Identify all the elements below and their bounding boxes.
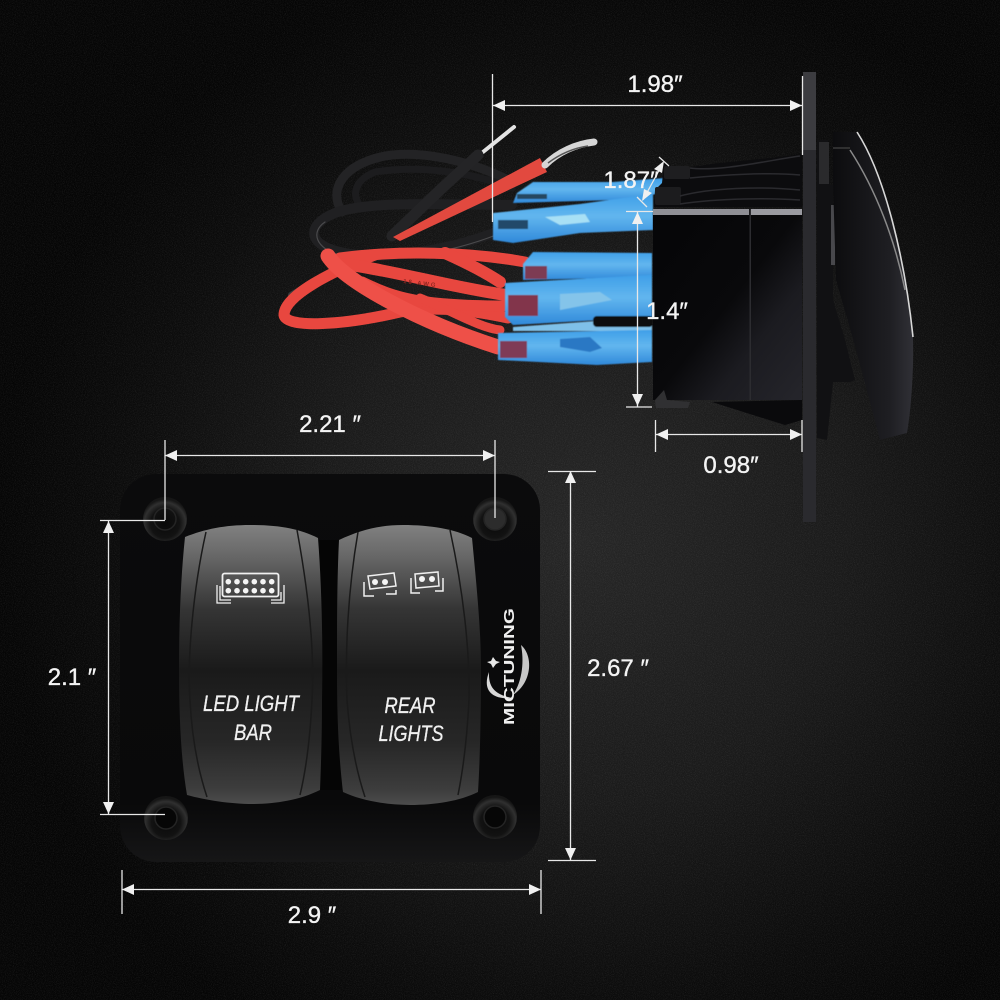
black wires [291, 154, 512, 295]
dimension: 2.1 in: 2.1 ″ [48, 664, 97, 691]
upright black wire with pin [392, 127, 514, 236]
dimension: 1.98 in: 1.98″ [627, 71, 683, 98]
mounting plate edge [803, 72, 816, 522]
rocker frame [318, 540, 342, 790]
rocker: rear lights [337, 525, 481, 805]
dimension: 1.98 in [492, 71, 803, 222]
screw inner details [154, 508, 506, 829]
rocker: LED light bar [179, 525, 322, 804]
screw holes [143, 497, 517, 840]
dimension: 1.87 in: 1.87″ [603, 167, 659, 194]
dimension: 2.67 in [548, 471, 649, 860]
dimension: 0.98 in [656, 420, 802, 479]
icon: rear light right [411, 572, 443, 593]
dimension: 2.9 in: 2.9 ″ [288, 902, 337, 929]
logo: MICTUNING: MICTUNING [501, 608, 518, 725]
front gasket and clip [817, 140, 855, 440]
mounting plate [120, 474, 540, 862]
rocker legend second line: LIGHTS [378, 721, 444, 746]
dimension: 1.4 in: 1.4″ [646, 298, 688, 325]
upright red wire with crimped tip [393, 142, 594, 241]
panel: front view of switch plate [120, 474, 540, 862]
dimension: 1.4 in [626, 211, 688, 407]
dimension: 2.1 in [48, 520, 165, 814]
switch housing [653, 209, 802, 425]
panel: side view of switch with wires [284, 72, 913, 522]
18 AWG wire marking: 18 AWG [403, 279, 438, 289]
dimension: 0.98 in: 0.98″ [703, 452, 759, 479]
dimension: 2.9 in [122, 870, 541, 929]
rocker legend: LED LIGHT [203, 691, 300, 716]
dimension: 1.87 in [603, 157, 669, 207]
rocker seams [189, 530, 313, 797]
switch terminals [654, 154, 802, 207]
dimension: 2.21 in [165, 411, 495, 520]
blue connectors [493, 178, 665, 365]
rocker legend: REAR [384, 693, 436, 718]
dimension: 2.67 in: 2.67 ″ [587, 655, 649, 682]
rocker seams [346, 530, 469, 797]
icon: LED light bar [217, 574, 284, 603]
rocker legend second line: BAR [234, 720, 272, 745]
dimension: 2.21 in: 2.21 ″ [299, 411, 361, 438]
red wires [284, 253, 525, 347]
logo: MICTUNING [487, 608, 529, 725]
icon: rear light left [364, 573, 396, 596]
rocker side profile [833, 132, 913, 440]
